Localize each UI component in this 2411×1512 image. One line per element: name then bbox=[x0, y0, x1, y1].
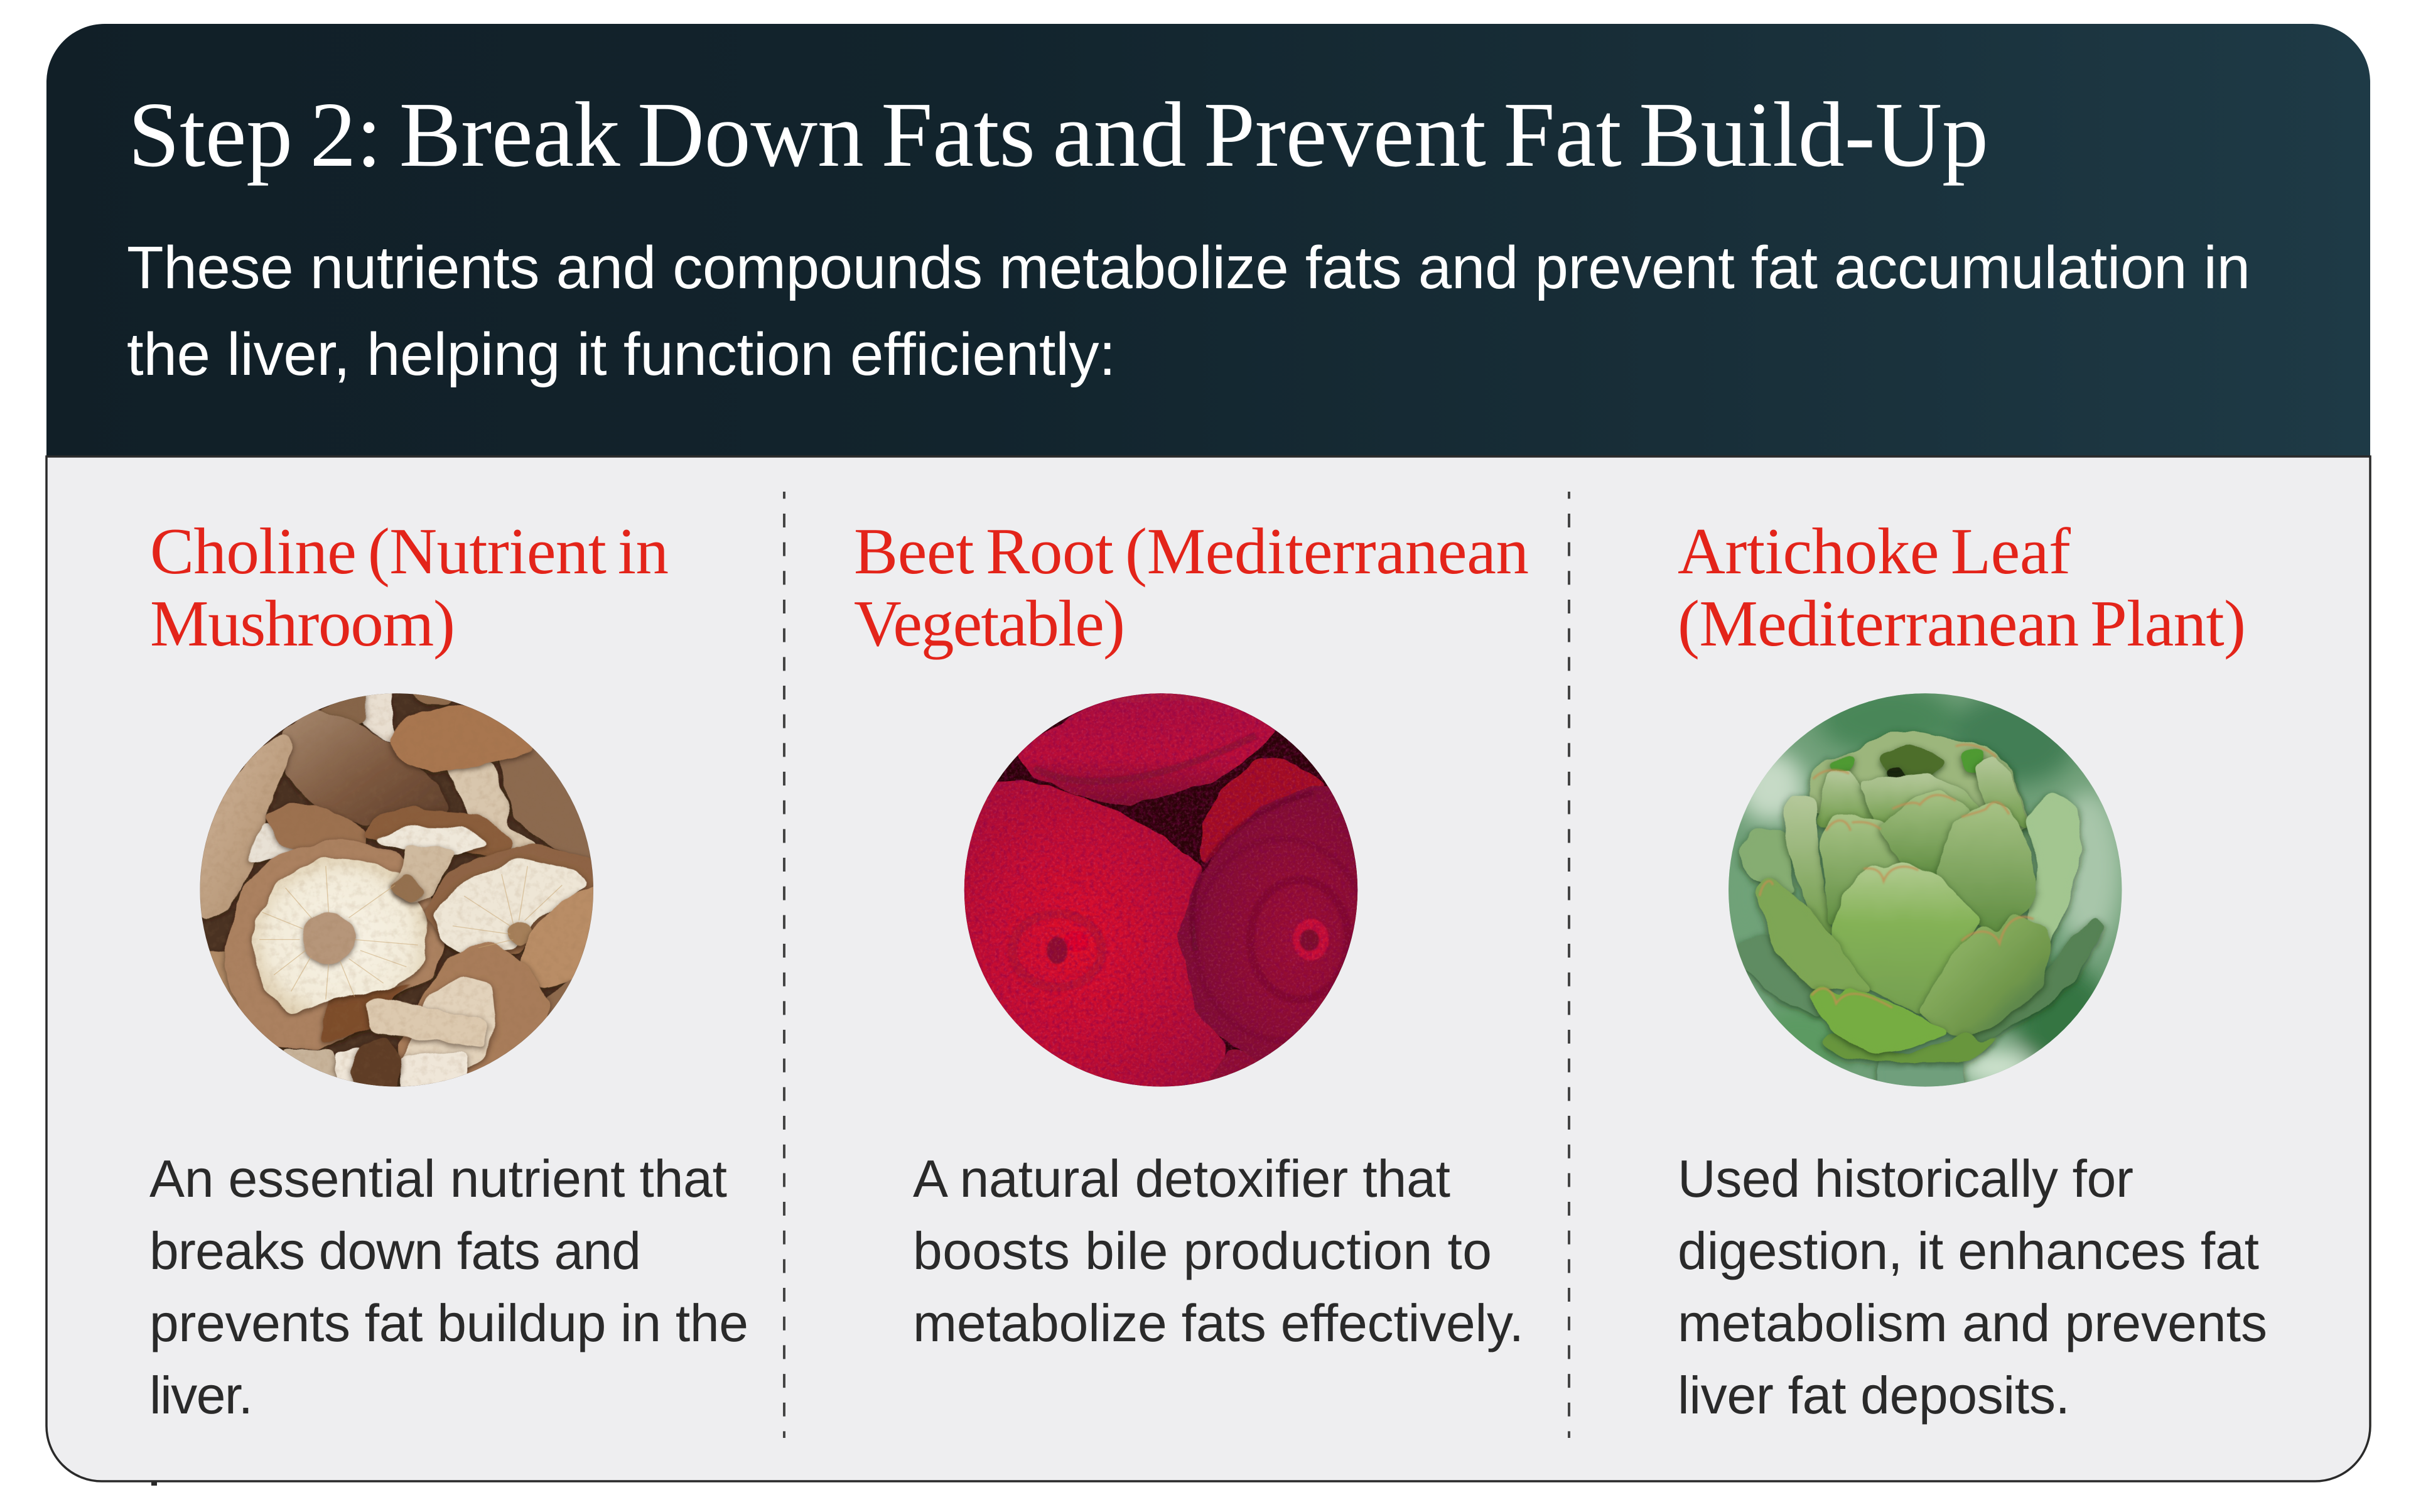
body panel bbox=[46, 456, 2370, 1481]
description: beet root: metabolize fats effectively. bbox=[913, 1293, 1524, 1353]
description: artichoke leaf: metabolism and prevents bbox=[1678, 1293, 2267, 1353]
description: choline: liver. bbox=[149, 1366, 253, 1425]
panel: choline bbox=[149, 514, 748, 1425]
description: artichoke leaf: digestion, it enhances fat bbox=[1678, 1221, 2259, 1280]
description: beet root: A natural detoxifier that bbox=[913, 1149, 1450, 1208]
heading: artichoke leaf: Artichoke Leaf bbox=[1678, 514, 2071, 588]
heading: beet root bbox=[854, 514, 1529, 660]
intro text: the liver, helping it function efficiently: bbox=[127, 321, 1116, 388]
description: beet root: boosts bile production to bbox=[913, 1221, 1492, 1280]
heading: choline: Choline (Nutrient in bbox=[150, 514, 669, 588]
title: Step 2: Break Down Fats and Prevent Fat Build-Up bbox=[128, 84, 1988, 186]
intro text: These nutrients and compounds metabolize fats and prevent fat accumulation in bbox=[127, 234, 2250, 301]
description: artichoke leaf bbox=[1678, 1149, 2267, 1425]
description: choline: breaks down fats and bbox=[149, 1221, 641, 1280]
intro text bbox=[127, 234, 2250, 388]
small tick below panel bbox=[151, 1482, 157, 1486]
photo: beet slices bbox=[964, 693, 1357, 1087]
description: choline: An essential nutrient that bbox=[149, 1149, 727, 1208]
panel: artichoke leaf bbox=[1678, 514, 2267, 1425]
heading: beet root: Beet Root (Mediterranean bbox=[854, 514, 1529, 588]
panel: beet root bbox=[854, 514, 1529, 1353]
description: choline bbox=[149, 1149, 748, 1425]
description: beet root bbox=[913, 1149, 1524, 1353]
header band bbox=[46, 24, 2370, 456]
description: artichoke leaf: liver fat deposits. bbox=[1678, 1366, 2070, 1425]
heading: artichoke leaf: (Mediterranean Plant) bbox=[1678, 586, 2246, 660]
heading: beet root: Vegetable) bbox=[854, 586, 1125, 660]
description: artichoke leaf: Used historically for bbox=[1678, 1149, 2133, 1208]
photo: mushrooms bbox=[190, 686, 603, 1095]
heading: choline: Mushroom) bbox=[150, 586, 455, 660]
heading: artichoke leaf bbox=[1678, 514, 2246, 660]
description: choline: prevents fat buildup in the bbox=[149, 1293, 748, 1353]
photo: artichoke bbox=[1725, 684, 2135, 1095]
heading: choline bbox=[150, 514, 669, 660]
column dividers bbox=[784, 492, 1569, 1438]
